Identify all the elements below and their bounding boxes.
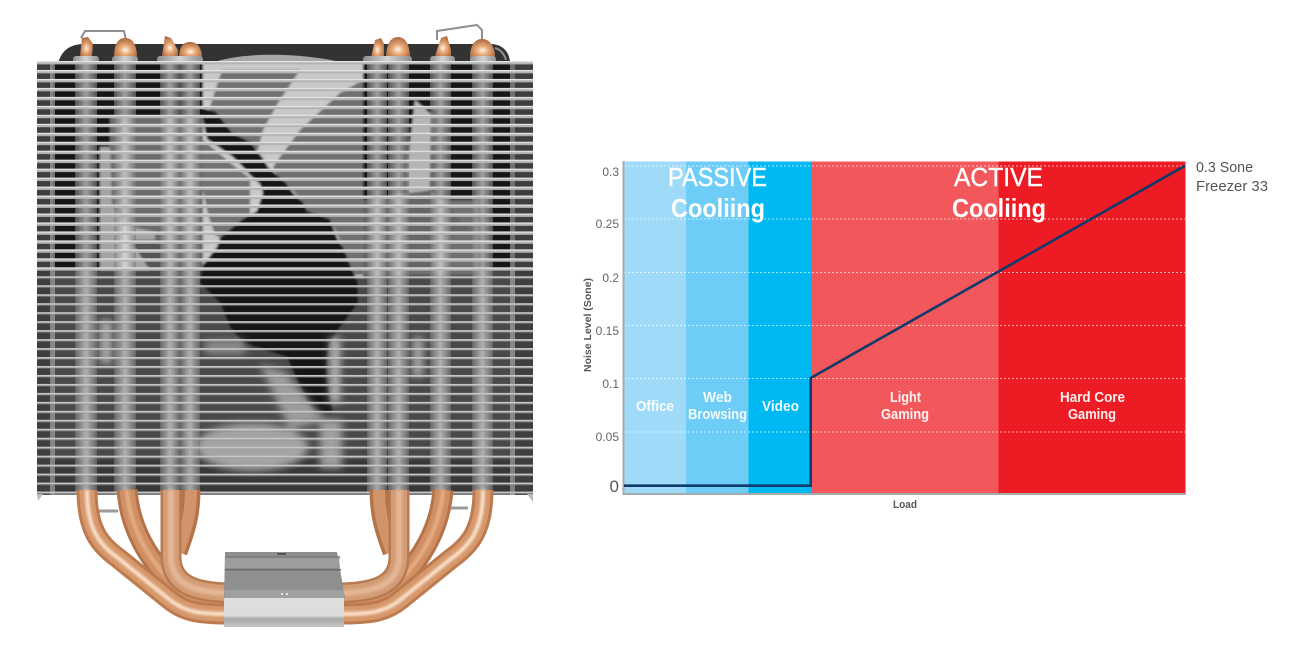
label: hard core gaming: Gaming xyxy=(1068,407,1116,423)
y axis ticks: 0.25 xyxy=(596,217,619,231)
label: light gaming: Gaming xyxy=(881,407,929,423)
cooler photo xyxy=(37,25,533,627)
noise line xyxy=(624,166,1185,486)
label: hard core gaming: Hard Core xyxy=(1060,390,1125,406)
y axis ticks xyxy=(596,165,619,496)
callout: 0.3 sone freezer 33 xyxy=(1196,159,1268,195)
light fan blades at bottom xyxy=(100,320,423,471)
label: hard core gaming xyxy=(1060,390,1125,423)
label: web browsing: Web xyxy=(703,390,732,406)
fin stack xyxy=(37,61,533,495)
copper heat pipes left xyxy=(87,490,228,614)
fins upper xyxy=(37,61,533,271)
retention clip right xyxy=(437,25,506,60)
label: web browsing: Browsing xyxy=(688,407,747,423)
y axis title: Noise Level (Sone) xyxy=(582,278,594,372)
band: web browsing xyxy=(686,162,748,494)
noise chart xyxy=(582,159,1268,511)
wires under the fins xyxy=(98,508,468,511)
heading: passive cooling: PASSIVE xyxy=(668,162,767,192)
label: office: Office xyxy=(636,399,674,415)
grid lines xyxy=(624,166,1185,432)
callout: 0.3 sone freezer 33: Freezer 33 xyxy=(1196,178,1268,195)
y axis ticks: 0.2 xyxy=(602,271,619,285)
heading: active cooling: ACTIVE xyxy=(954,162,1043,192)
copper heat pipes right xyxy=(342,490,483,614)
heading: active cooling xyxy=(952,162,1046,223)
label: video: Video xyxy=(762,399,799,415)
band: hard core gaming xyxy=(998,162,1186,494)
fins lower xyxy=(37,270,533,495)
y axis ticks: 0.05 xyxy=(596,430,619,444)
fan blade top arc xyxy=(212,55,345,63)
fin corner tabs xyxy=(37,494,533,502)
heat pipe columns through fins xyxy=(75,61,493,495)
band: light gaming xyxy=(811,162,998,494)
y axis ticks: 0.15 xyxy=(596,324,619,338)
label: light gaming xyxy=(881,390,929,423)
band: office xyxy=(623,162,686,494)
side fin folds xyxy=(37,61,53,495)
heading: passive cooling: Cooliing xyxy=(671,193,765,223)
label: web browsing xyxy=(688,390,747,423)
fan housing top xyxy=(58,44,510,63)
label: light gaming: Light xyxy=(890,390,921,406)
retention clip left xyxy=(81,31,126,40)
fan seen through fins xyxy=(37,61,533,495)
x axis title: Load xyxy=(893,499,917,511)
callout: 0.3 sone freezer 33: 0.3 Sone xyxy=(1196,159,1253,176)
y axis ticks: 0 xyxy=(610,477,619,496)
contact base block xyxy=(224,552,345,627)
y axis ticks: 0.1 xyxy=(602,377,619,391)
y axis ticks: 0.3 xyxy=(602,165,619,179)
heat pipe tips xyxy=(73,36,496,63)
band: video xyxy=(748,162,811,494)
heading: active cooling: Cooliing xyxy=(952,193,1046,223)
heading: passive cooling xyxy=(668,162,767,223)
axes xyxy=(624,161,1186,494)
